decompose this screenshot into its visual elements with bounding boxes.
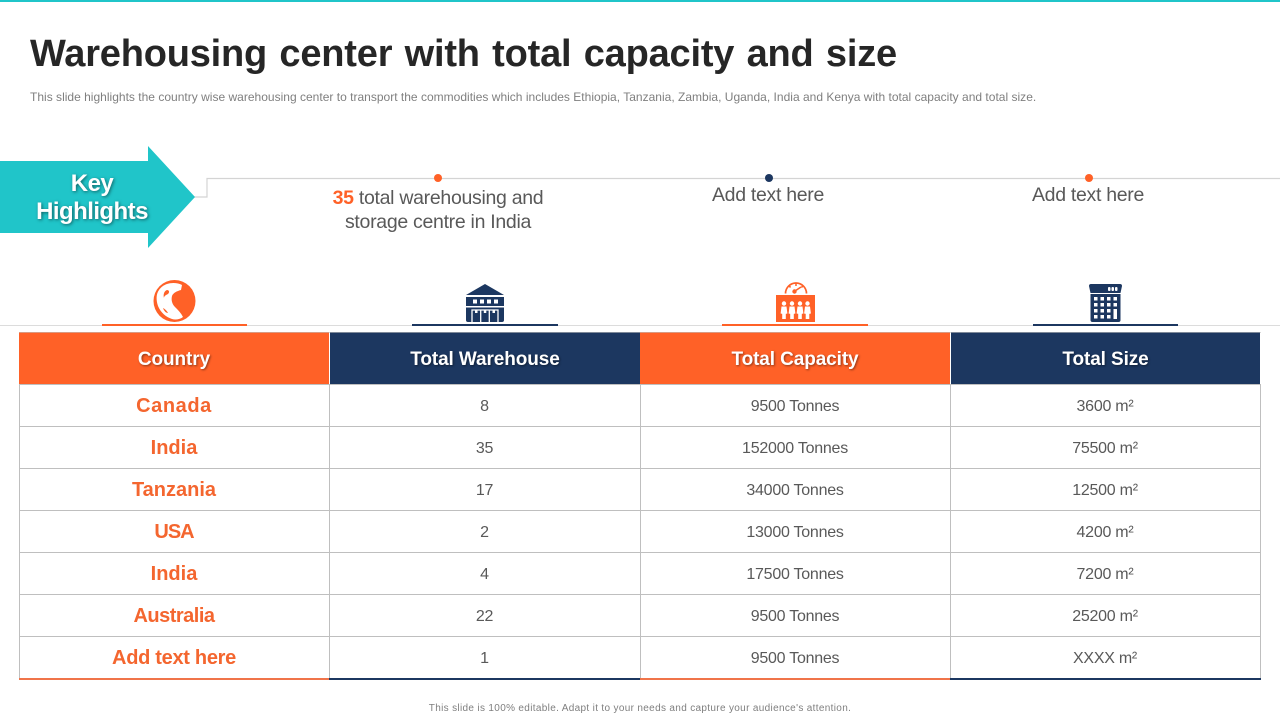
row: India second: 17500 Tonnes — [746, 566, 844, 583]
highlight 3 text: Add text here — [1032, 184, 1144, 206]
row: Canada: 3600 m² — [1077, 398, 1133, 415]
footer note: This slide is 100% editable. Adapt it to your needs and capture your audience's attention. — [429, 703, 851, 714]
divider above table — [0, 325, 1280, 326]
highlight 1 text: 35 total warehousing and — [333, 187, 543, 209]
row: India — [151, 437, 1138, 459]
row: Canada: 8 — [480, 398, 489, 415]
underline: size — [1033, 324, 1178, 326]
row: India second — [151, 563, 1134, 585]
key highlights arrow: Highlights — [36, 198, 148, 225]
data table — [19, 332, 1261, 680]
row: Canada: Canada — [136, 395, 212, 417]
header: total size: Total Size — [1062, 349, 1149, 370]
row: USA: USA — [154, 521, 194, 543]
row: Add text here — [112, 647, 1137, 669]
header: total size — [951, 332, 1260, 384]
key highlights arrow — [0, 146, 195, 248]
key highlights arrow: Key — [71, 170, 113, 197]
icon: calculator — [1089, 284, 1122, 322]
connector line with highlight dots — [194, 174, 1280, 198]
subtitle: This slide highlights the country wise warehousing center to transport the commodities which includes Ethiopia, Tanzania, Zambia, Uganda, India and Kenya with total capacity and total size. — [30, 90, 1036, 104]
row: Add text here: 9500 Tonnes — [751, 650, 839, 667]
row: Australia: Australia — [133, 605, 215, 627]
row: Tanzania: 34000 Tonnes — [746, 482, 844, 499]
top accent bar — [0, 0, 1280, 2]
icon: warehouse — [466, 284, 504, 322]
underline: country — [102, 324, 247, 326]
row: India: 75500 m² — [1072, 440, 1138, 457]
row: India: 35 — [476, 440, 493, 457]
row: Australia: 22 — [476, 608, 493, 625]
highlight 1 text: storage centre in India — [345, 211, 531, 233]
row: India second: 4 — [480, 566, 489, 583]
row: Add text here: 1 — [480, 650, 489, 667]
highlight 1 text — [333, 187, 543, 233]
header: total capacity — [640, 332, 950, 384]
row: USA: 4200 m² — [1077, 524, 1133, 541]
row: Tanzania — [132, 479, 1138, 501]
row: USA — [154, 521, 1134, 543]
icon: capacity gauge with people — [776, 282, 815, 322]
header: total capacity: Total Capacity — [731, 349, 859, 370]
row: Add text here: XXXX m² — [1073, 650, 1137, 667]
row: USA: 13000 Tonnes — [746, 524, 844, 541]
row: Australia — [133, 605, 1138, 627]
header: total warehouse: Total Warehouse — [410, 349, 560, 370]
underline: capacity — [722, 324, 868, 326]
row: Australia: 25200 m² — [1072, 608, 1138, 625]
row: Tanzania: 17 — [476, 482, 493, 499]
highlight 2 text: Add text here — [712, 184, 824, 206]
row: Tanzania: Tanzania — [132, 479, 216, 501]
row: India second: 7200 m² — [1077, 566, 1133, 583]
row: Australia: 9500 Tonnes — [751, 608, 839, 625]
icon: globe — [154, 280, 196, 322]
row: Canada — [136, 395, 1134, 417]
row: Canada: 9500 Tonnes — [751, 398, 839, 415]
underline: warehouse — [412, 324, 558, 326]
row: Add text here: Add text here — [112, 647, 236, 669]
header: total warehouse — [330, 332, 640, 384]
header: country — [19, 332, 329, 384]
row: Tanzania: 12500 m² — [1072, 482, 1138, 499]
row: USA: 2 — [480, 524, 489, 541]
header: country: Country — [138, 349, 210, 370]
row: India second: India — [151, 563, 197, 585]
title: Warehousing center with total capacity and size — [30, 33, 897, 75]
row: India: 152000 Tonnes — [742, 440, 848, 457]
row: India: India — [151, 437, 197, 459]
